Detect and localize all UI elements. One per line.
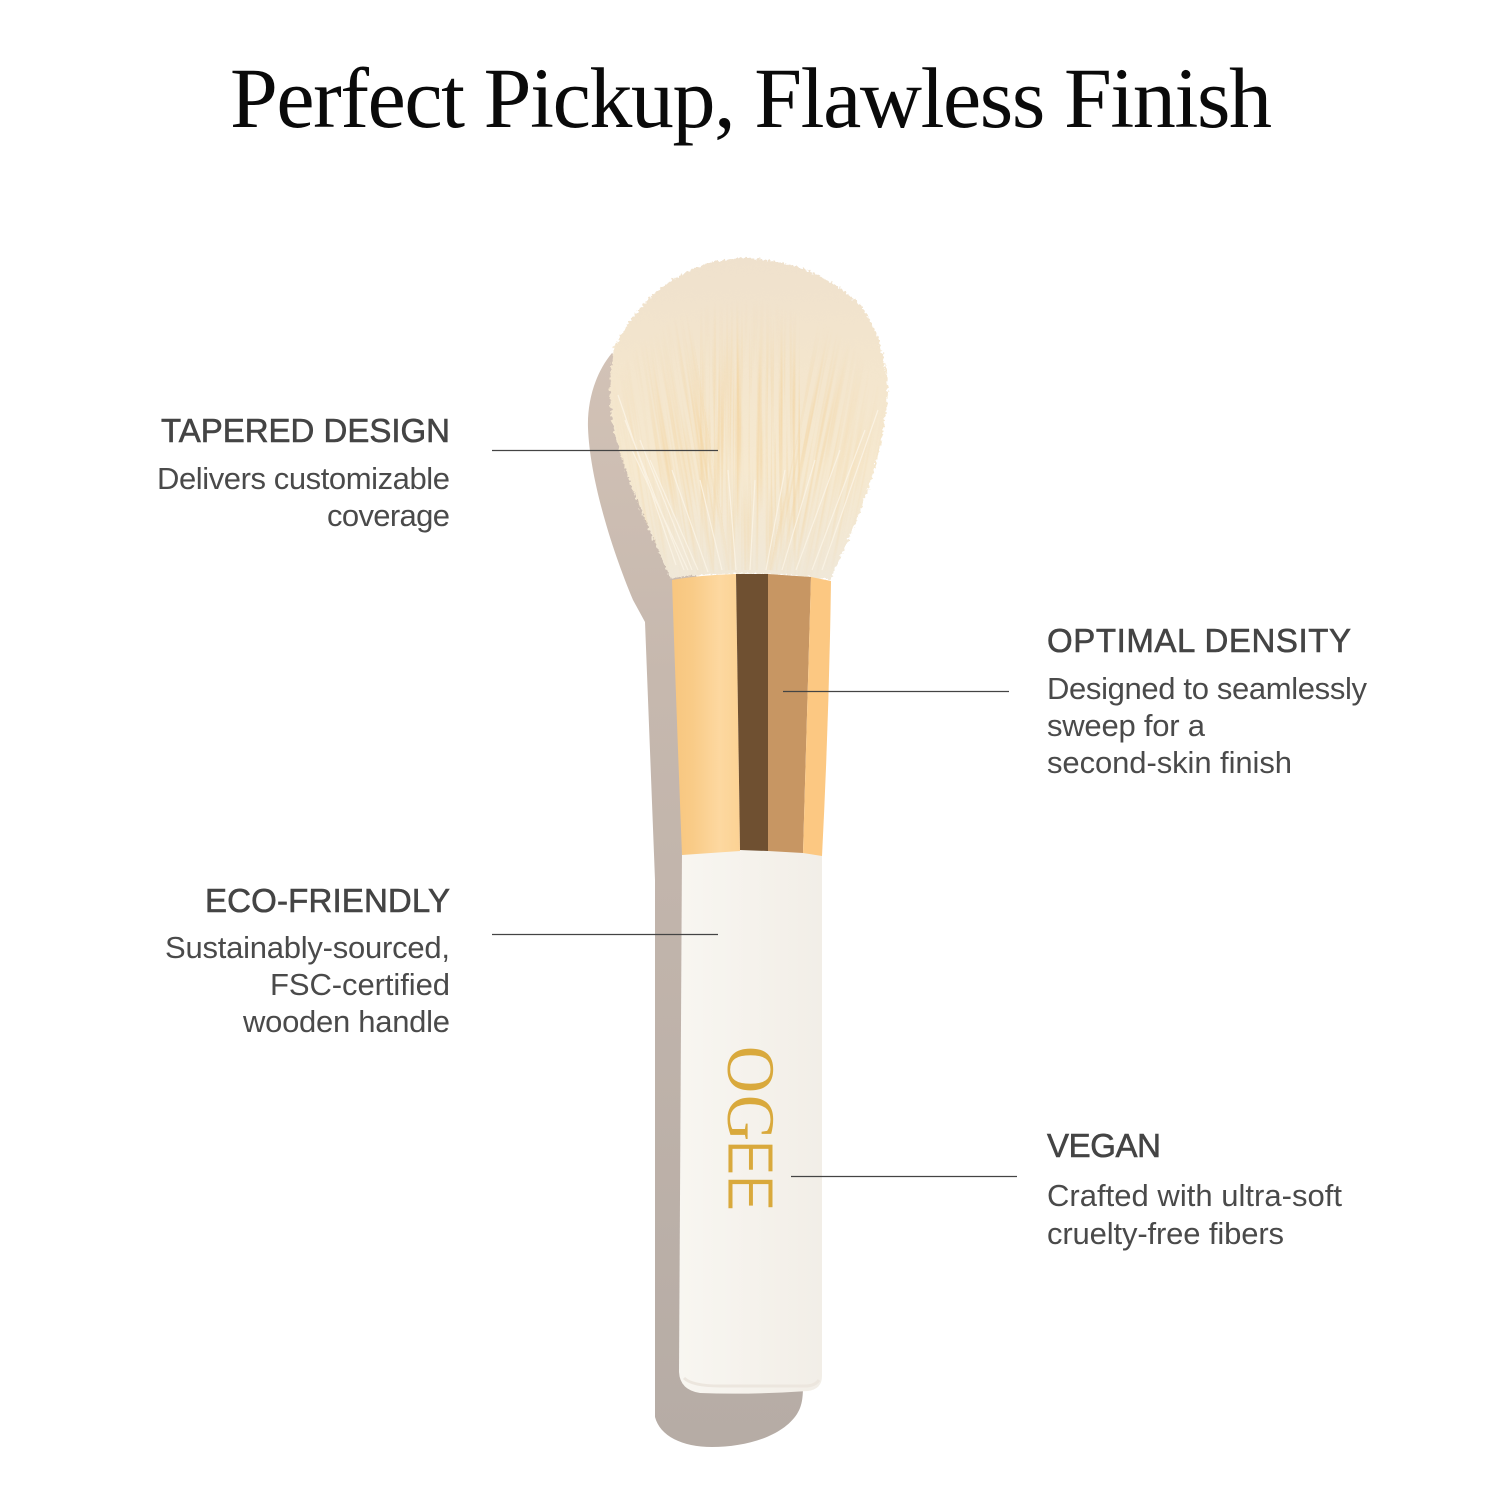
callout: eco-friendly: Sustainably-sourced, <box>165 930 450 965</box>
callout: tapered design: coverage <box>327 498 450 533</box>
handle base edge <box>684 1378 819 1386</box>
leader line <box>791 1176 1017 1178</box>
callout: eco-friendly: FSC-certified <box>270 967 450 1002</box>
callout: eco-friendly <box>165 882 718 1039</box>
callout: tapered design: Delivers customizable <box>157 461 450 496</box>
callout: optimal density: OPTIMAL DENSITY <box>1047 622 1351 659</box>
callout: eco-friendly: wooden handle <box>242 1004 450 1039</box>
brush illustration <box>588 258 914 1447</box>
gold ferrule <box>672 574 831 856</box>
callout: tapered design: TAPERED DESIGN <box>161 412 450 449</box>
OGEE logo: E <box>714 1140 787 1175</box>
leader line <box>783 690 1009 692</box>
callout: eco-friendly: ECO-FRIENDLY <box>205 882 450 919</box>
callout: optimal density <box>783 622 1368 780</box>
OGEE logo: E <box>714 1175 787 1211</box>
callout: vegan: cruelty-free fibers <box>1047 1216 1284 1251</box>
OGEE logo <box>713 1046 789 1211</box>
callout: tapered design <box>157 412 718 533</box>
OGEE logo: O <box>713 1046 789 1093</box>
leader line <box>492 934 718 936</box>
callout: vegan: VEGAN <box>1047 1127 1161 1164</box>
callout: vegan: Crafted with ultra-soft <box>1047 1178 1342 1213</box>
leader line <box>492 450 718 452</box>
callout: optimal density: second-skin finish <box>1047 745 1292 780</box>
callout: vegan <box>791 1127 1342 1251</box>
handle <box>679 850 822 1394</box>
brush shadow <box>588 353 803 1447</box>
title: Perfect Pickup, Flawless Finish <box>230 50 1272 146</box>
OGEE logo: G <box>713 1095 789 1141</box>
brush head bristles <box>608 256 890 580</box>
callout: optimal density: sweep for a <box>1047 708 1206 743</box>
callout: optimal density: Designed to seamlessly <box>1047 671 1368 706</box>
